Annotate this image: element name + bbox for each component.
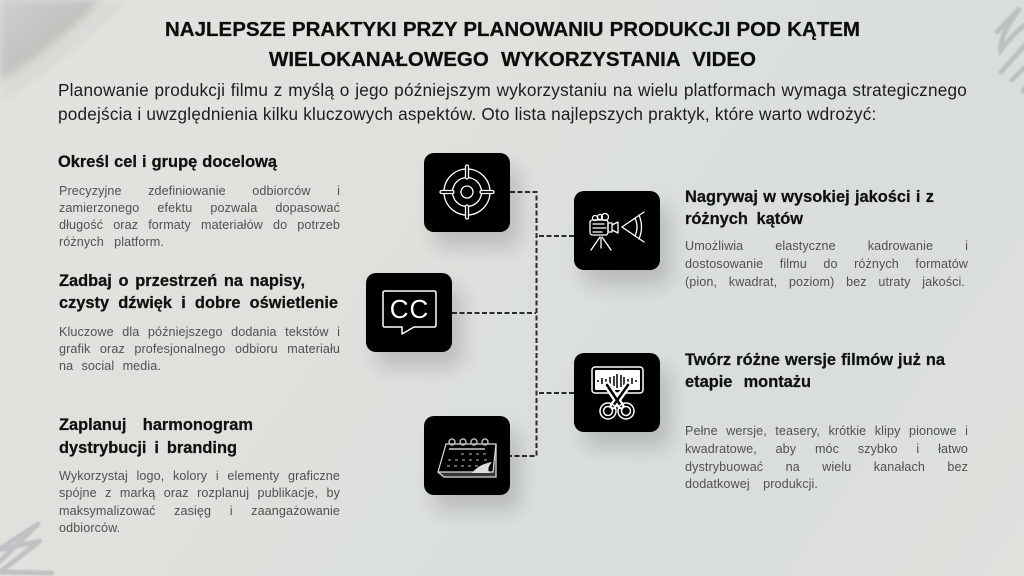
icon: closed captions: [366, 273, 452, 352]
block: różne wersje: [685, 351, 968, 491]
body text: grafik oraz profesjonalnego odbioru materiału: [59, 342, 340, 356]
heading: etapie montażu: [685, 373, 811, 391]
icon: camera: [574, 191, 660, 270]
title: [165, 18, 860, 71]
intro text: [58, 80, 967, 124]
body text: na social media.: [59, 359, 161, 373]
block: napisy, dźwięk, oświetlenie: [59, 272, 340, 373]
body text: Precyzyjne zdefiniowanie odbiorców i: [59, 184, 340, 198]
icon: scissors and waveform: [574, 353, 660, 432]
block: wysoka jakość: [685, 188, 968, 289]
title: WIELOKANAŁOWEGO WYKORZYSTANIA VIDEO: [269, 48, 756, 71]
heading: różnych kątów: [685, 210, 803, 228]
icon: closed captions: CC: [390, 294, 429, 324]
body text: Umożliwia elastyczne kadrowanie i: [685, 239, 968, 253]
intro text: Planowanie produkcji filmu z myślą o jego późniejszym wykorzystaniu na wielu platformach wymaga strategicznego: [58, 80, 967, 100]
body text: odbiorców.: [59, 521, 120, 535]
body text: dodatkowej produkcji.: [685, 477, 818, 491]
heading: [59, 272, 338, 312]
heading: [59, 416, 253, 457]
body text: spójne z marką oraz rozplanuj publikacje, by: [59, 486, 340, 500]
body text: kwadratowe, aby móc szybko i łatwo: [685, 442, 968, 456]
body text: (pion, kwadrat, poziom) bez utraty jakości.: [685, 275, 965, 289]
body text: [59, 469, 340, 535]
body text: [59, 325, 340, 373]
body text: Pełne wersje, teasery, krótkie klipy pionowe i: [685, 424, 968, 438]
heading: Zaplanuj harmonogram: [59, 416, 253, 434]
icon: calendar: [424, 416, 510, 495]
body text: Wykorzystaj logo, kolory i elementy graficzne: [59, 469, 340, 483]
heading: Nagrywaj w wysokiej jakości i z: [685, 188, 934, 206]
heading: [685, 188, 934, 228]
body text: różnych platform.: [59, 235, 164, 249]
heading: Określ cel i grupę docelową: [58, 153, 277, 171]
title: NAJLEPSZE PRAKTYKI PRZY PLANOWANIU PRODUKCJI POD KĄTEM: [165, 18, 860, 41]
body text: dystrybuować na wielu kanałach bez: [685, 460, 968, 474]
icon: target: [424, 153, 510, 232]
heading: dystrybucji i branding: [59, 439, 237, 457]
body text: [685, 424, 968, 491]
body text: [59, 184, 340, 249]
heading: czysty dźwięk i dobre oświetlenie: [59, 294, 338, 312]
body text: maksymalizować zasięg i zaangażowanie: [59, 504, 340, 518]
body text: zamierzonego efektu pozwala dopasować: [59, 201, 340, 215]
heading: Twórz różne wersje filmów już na: [685, 351, 945, 369]
intro text: podejścia i uwzględnienia kilku kluczowych aspektów. Oto lista najlepszych praktyk, które warto wdrożyć:: [58, 104, 876, 124]
body text: Kluczowe dla późniejszego dodania tekstów i: [59, 325, 340, 339]
body text: dostosowanie filmu do różnych formatów: [685, 257, 968, 271]
body text: [685, 239, 968, 289]
block: harmonogram i branding: [59, 416, 340, 535]
heading: [685, 351, 946, 391]
body text: długość oraz formaty materiałów do potrzeb: [59, 218, 340, 232]
heading: Zadbaj o przestrzeń na napisy,: [59, 272, 305, 290]
block: cel i grupa docelowa: [58, 153, 340, 249]
